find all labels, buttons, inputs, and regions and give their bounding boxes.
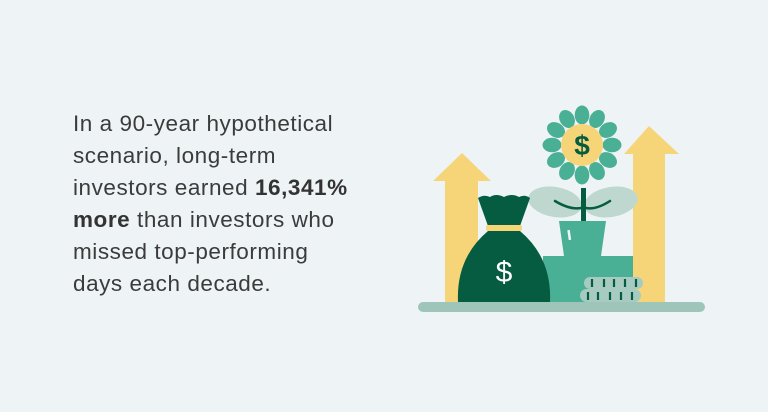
arrow: left yellow [433, 153, 491, 302]
text block: statistic: more than investors who [73, 207, 335, 232]
text block: statistic: missed top-performing [73, 239, 308, 264]
pot [559, 221, 606, 256]
text block: statistic: scenario, long-term [73, 143, 276, 168]
plant: leaves and stem [526, 183, 640, 223]
text block: statistic [73, 111, 348, 296]
text block: statistic: In a 90-year hypothetical [73, 111, 333, 136]
coins stack [580, 277, 643, 302]
ground bar [418, 302, 705, 312]
money bag [458, 195, 550, 302]
flower with dollar center [542, 106, 622, 184]
flower with dollar center: $ [574, 130, 590, 161]
money bag: $ [496, 256, 513, 289]
text block: statistic: investors earned 16,341% [73, 175, 348, 200]
arrow: right yellow [624, 126, 679, 302]
pedestal block [543, 256, 633, 302]
text block: statistic: days each decade. [73, 271, 271, 296]
